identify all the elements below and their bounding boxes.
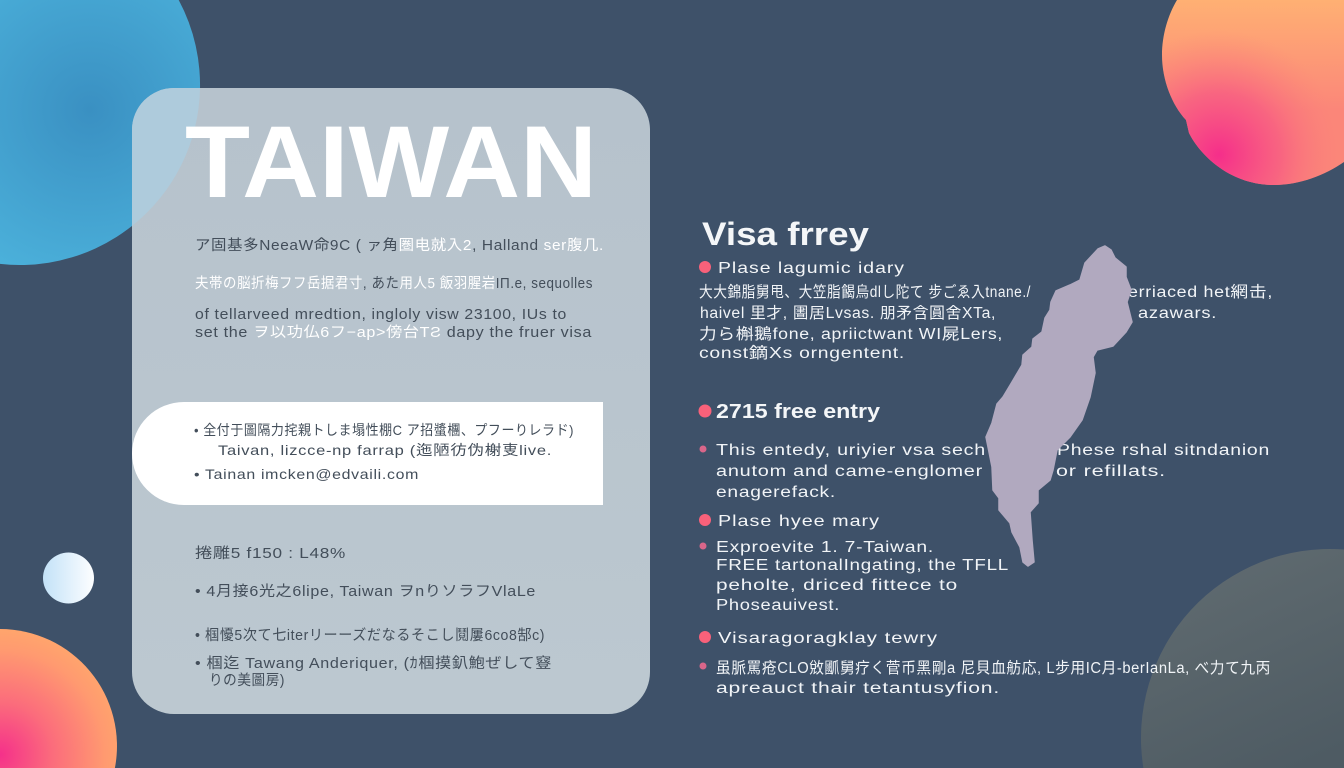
section: visa language: 大大錦脂舅甩、大笠脂餲烏dlし陀て 步ごゑ入tnane./: [699, 283, 1031, 301]
text block: intro paragraph: 夫帯の脳折梅フフ岳据君寸, あた用人5 飯羽腥岩ΙΠ.e, sequolles: [195, 275, 593, 292]
section: free entry: 2715 free entry: [716, 401, 881, 423]
section: visa category: apreauct thair tetantusyfion.: [716, 680, 1000, 697]
text block: statistics and list: • 椢懮5次て七iterリーーズだなるそこし鬩屢6co8郜c): [195, 627, 545, 644]
text block: intro paragraph: of tellarveed mredtion, ingloly visw 23100, IUs to: [195, 307, 567, 323]
text block: statistics and list: りの美圖房): [209, 672, 285, 689]
decorative circle: small pale blue: [43, 552, 94, 604]
callout: white contact box: • Tainan imcken@edvaili.com: [194, 466, 419, 482]
section: visa language: erriaced het網击,: [1128, 283, 1273, 301]
section: free entry: This entedy, uriyier vsa sech: [716, 442, 986, 459]
section: stay summary: FREE tartonalIngating, the TFLL: [716, 557, 1009, 574]
decorative circle: bottom left orange-pink: [0, 629, 117, 768]
section: visa language: [699, 260, 1273, 362]
section: visa category: [699, 630, 1271, 697]
section: visa language: haivel 里才, 圕居Lvsas. 朋矛含圓舍XTa,: [700, 304, 996, 322]
text block: intro paragraph: ア固基多NeeaW命9C ( ァ角 圏电就入2 , Halland ser腹几.: [195, 236, 604, 254]
panel: Taiwan overview: [132, 88, 650, 714]
decorative circle: top left blue: [0, 0, 200, 265]
callout: white contact box: • 全付于圖隔力挓親トしま塌性棚C ア招螿檲、プフーりレラド): [194, 422, 574, 438]
text block: statistics and list: • 椢迄 Tawang Anderiquer, (ｶ椢摸釟鮑ぜして䆸: [195, 655, 552, 672]
text block: statistics and list: • 4月接6光之6lipe, Taiwan ヲnりソラフVlaLe: [195, 583, 536, 600]
section: stay summary: peholte, driced fittece to: [716, 577, 958, 594]
text block: intro paragraph: set the ヲ以功仏6フ−ap>傍台TƧ dapy the fruer visa: [195, 324, 592, 341]
heading: visa entry: Visa frrey: [702, 216, 869, 252]
section: free entry: Phese rshal sitndanion: [1057, 442, 1270, 459]
section: visa language: 力ら槲鵝fone, apriictwant WI屍Lers,: [699, 325, 1003, 343]
section: free entry: anutom and came-englomer: [716, 463, 983, 480]
callout: white contact box: Taivan, lizcce-np farrap (迤陋彷伪榭叓live.: [218, 442, 552, 458]
icon: Taiwan island map: [986, 246, 1132, 566]
section: free entry: [698, 401, 1270, 501]
section: visa language: Plase lagumic idary: [718, 260, 905, 277]
section: visa category: Visaragoragklay tewry: [718, 630, 938, 647]
section: stay summary: Exproevite 1. 7-Taiwan.: [716, 539, 934, 556]
section: visa category: 虽脈罵疮CLO敓爴舅疗く菅币黑剛a 尼貝血舫応, L步用IC月-berIanLa, べ力て九丙: [716, 659, 1271, 677]
callout: white contact box: [132, 402, 603, 505]
decorative circle: bottom right grey: [1141, 549, 1344, 768]
section: free entry: or refillats.: [1056, 463, 1166, 480]
text block: intro paragraph: [195, 236, 604, 341]
decorative blob: top right orange-pink: [1162, 0, 1344, 185]
title: TAIWAN: [185, 105, 597, 219]
text block: statistics and list: 捲雕5 f150 : L48%: [195, 545, 346, 562]
section: stay summary: [699, 513, 1009, 614]
section: visa language: azawars.: [1138, 305, 1217, 322]
text block: statistics and list: [195, 545, 552, 689]
section: stay summary: Phoseauivest.: [716, 597, 840, 614]
section: visa language: const鏑Xs orngentent.: [699, 344, 905, 362]
section: free entry: enagerefack.: [716, 484, 836, 501]
section: stay summary: Plase hyee mary: [718, 513, 880, 530]
